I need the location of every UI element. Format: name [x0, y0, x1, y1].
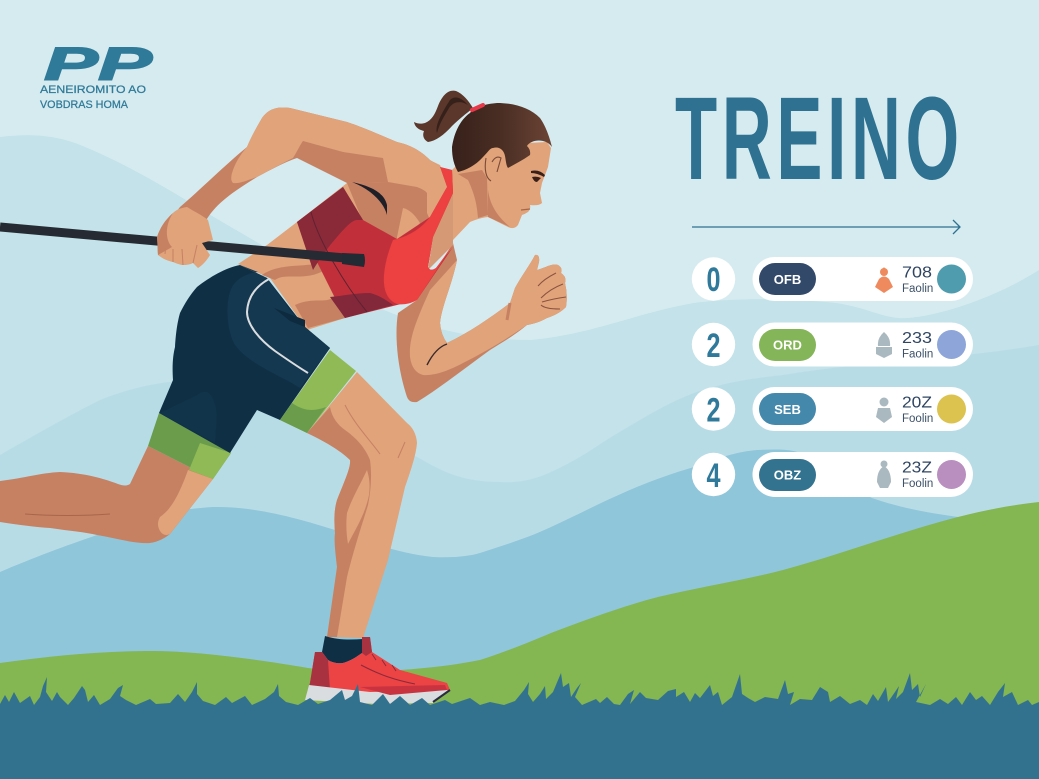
colour dot [937, 394, 966, 424]
row 4 [692, 452, 973, 497]
icon [875, 267, 893, 293]
rear leg [0, 446, 213, 543]
pill card [752, 322, 973, 366]
tag: OBZ [774, 468, 801, 482]
pill card [752, 257, 973, 301]
logo tagline: AENEIROMITO AO [40, 84, 146, 96]
rear leg green band [148, 413, 231, 479]
tag [759, 329, 816, 361]
grass foreground [0, 673, 1039, 779]
value [902, 264, 933, 295]
tag [759, 263, 816, 295]
shorts [159, 265, 330, 453]
colour dot [937, 460, 966, 489]
front arm [396, 243, 567, 402]
row 2 [692, 322, 973, 366]
ear [487, 150, 506, 179]
front leg green band [280, 350, 356, 433]
torso skin [238, 140, 450, 330]
number badge [692, 453, 735, 496]
icon [877, 460, 891, 488]
tag [759, 459, 816, 491]
tag: ORD [773, 338, 802, 352]
front leg [307, 372, 417, 638]
value: Foolin [902, 478, 933, 490]
icon [876, 332, 892, 358]
training bar [0, 227, 365, 267]
tag: SEB [774, 402, 801, 417]
neck and face [433, 142, 551, 250]
colour dot [937, 330, 966, 359]
value: 233 [902, 330, 932, 347]
number badge [692, 387, 735, 431]
head and neck [414, 91, 552, 250]
title: TREINO [675, 73, 964, 205]
number badge: 4 [706, 457, 721, 495]
pill card [752, 387, 973, 431]
value: 20Z [902, 394, 932, 412]
ponytail [414, 91, 473, 142]
number badge: 2 [706, 392, 720, 430]
sports top [297, 167, 453, 318]
row 1 [692, 257, 973, 301]
chest skin opening [428, 190, 453, 270]
value [902, 460, 933, 490]
mouth [521, 209, 530, 210]
number badge: 2 [706, 327, 720, 365]
value: 23Z [902, 460, 932, 476]
value [902, 394, 933, 425]
logo mark: PP [44, 38, 153, 90]
arrow [692, 220, 960, 234]
pill card [752, 452, 973, 497]
tag: OFB [774, 272, 801, 287]
value: Foolin [902, 413, 933, 425]
icon [876, 398, 892, 423]
value: Faolin [902, 348, 933, 360]
row 3 [692, 387, 973, 431]
runner figure [0, 91, 567, 704]
number badge [692, 323, 735, 366]
number badge: 0 [706, 261, 720, 299]
logo [40, 38, 153, 111]
sock [322, 636, 363, 663]
hair [452, 103, 552, 172]
eye and brow [531, 170, 545, 177]
number badge [692, 257, 735, 301]
logo: VOBDRAS HOMA [40, 99, 129, 111]
value [902, 330, 933, 360]
rear arm [157, 107, 447, 245]
hair tie [472, 105, 483, 110]
value: Faolin [902, 283, 933, 295]
tag [759, 393, 816, 425]
value: 708 [902, 264, 932, 282]
running shoe [305, 637, 450, 704]
gripping hand [157, 207, 213, 268]
colour dot [937, 264, 966, 294]
